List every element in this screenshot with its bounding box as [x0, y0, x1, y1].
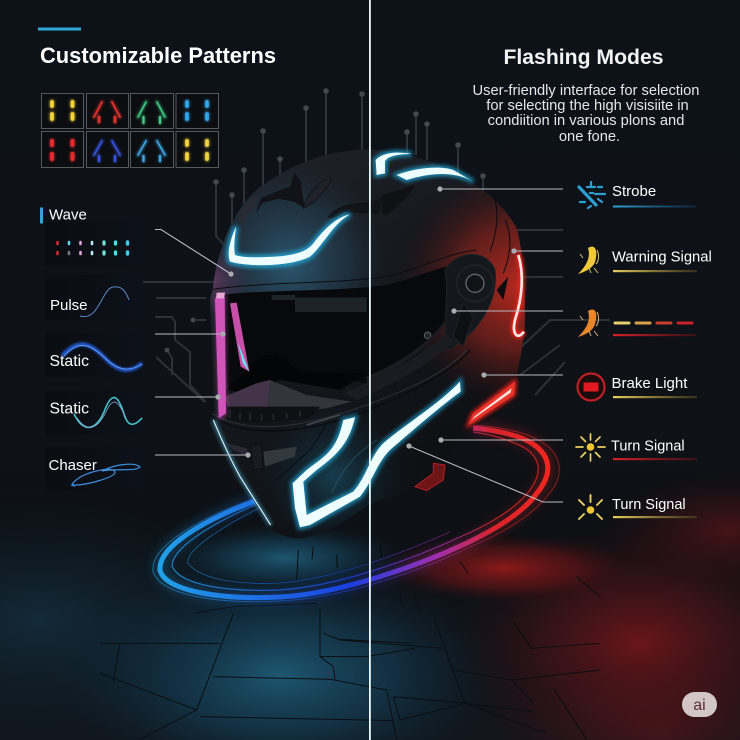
top vents	[237, 173, 415, 225]
chaser thumbnail	[45, 447, 143, 491]
red strip: lower	[469, 382, 515, 425]
pattern icon: green	[138, 102, 165, 123]
mode: turn signal one: Turn Signal	[611, 438, 685, 454]
pulse thumbnail: Pulse	[50, 297, 88, 314]
chin strap buckle	[415, 463, 445, 491]
cyan strip: crown	[376, 153, 473, 182]
shell	[200, 143, 533, 543]
mode: warning signal: Warning Signal	[612, 250, 712, 266]
pattern icon: amber	[187, 141, 207, 159]
red strip: rear	[514, 255, 524, 336]
wave label: Wave	[49, 206, 87, 224]
shell grooves	[213, 193, 510, 289]
circuit lines	[143, 88, 610, 402]
pattern icon: sky	[138, 141, 165, 161]
pattern icon: yellow	[52, 102, 72, 119]
light ring behind helmet	[153, 425, 559, 602]
description text: one fone.	[559, 129, 620, 145]
sun icon	[576, 434, 605, 461]
front thin light	[213, 420, 271, 525]
chin vent	[227, 425, 377, 493]
brake icon	[578, 374, 604, 400]
cyan strip: cheek	[293, 382, 461, 527]
interior lining	[343, 317, 453, 400]
helmet	[200, 143, 533, 543]
left pattern list	[40, 206, 143, 491]
mode: hazard dashes	[578, 309, 696, 337]
visor reflections	[272, 295, 367, 312]
accent bar	[38, 28, 81, 30]
ai badge: ai	[693, 697, 706, 714]
visor	[220, 266, 453, 393]
pattern icon: blue	[187, 102, 207, 119]
pulse thumbnail	[45, 275, 143, 320]
static thumbnail blue	[45, 333, 143, 377]
pink visor light	[215, 293, 249, 420]
wave thumbnail	[45, 222, 143, 266]
hazard dashes	[615, 322, 692, 324]
mode: turn signal two: Turn Signal	[612, 497, 686, 513]
pattern grid	[42, 94, 218, 168]
visor pivot plate	[424, 254, 508, 350]
mode: brake light	[578, 374, 697, 400]
pattern icon: red	[94, 102, 120, 122]
ai badge	[682, 692, 717, 717]
description text: condiition in various plons and	[488, 113, 684, 129]
wave marker	[40, 208, 43, 224]
mode: strobe	[579, 182, 696, 208]
leader lines	[155, 186, 563, 502]
hazard icon	[578, 309, 599, 337]
sun icon	[579, 495, 602, 519]
static thumbnail teal	[45, 391, 143, 435]
centre divider line	[369, 0, 371, 740]
static thumbnail teal: Static	[50, 400, 89, 418]
pattern icon: indigo	[94, 141, 120, 161]
warning icon	[578, 247, 599, 274]
cyan strip: forehead	[229, 214, 350, 265]
inner chin lining	[212, 350, 470, 431]
chaser thumbnail: Chaser	[48, 457, 97, 474]
mode: warning signal	[578, 247, 712, 274]
title: flashing modes: Flashing Modes	[503, 46, 664, 69]
mode: turn signal two	[579, 495, 697, 519]
description text: for selecting the high visisiite in	[486, 98, 689, 114]
pattern icon: red bars	[52, 141, 72, 159]
mode: strobe: Strobe	[612, 183, 656, 200]
strobe icon	[579, 182, 605, 208]
description text: User-friendly interface for selection	[473, 83, 699, 99]
floor glow and cracks	[0, 460, 740, 740]
static thumbnail blue: Static	[50, 353, 89, 370]
title: customizable patterns: Customizable Patterns	[40, 43, 276, 68]
mode: brake light: Brake Light	[612, 375, 688, 392]
mode: turn signal one	[576, 434, 697, 461]
